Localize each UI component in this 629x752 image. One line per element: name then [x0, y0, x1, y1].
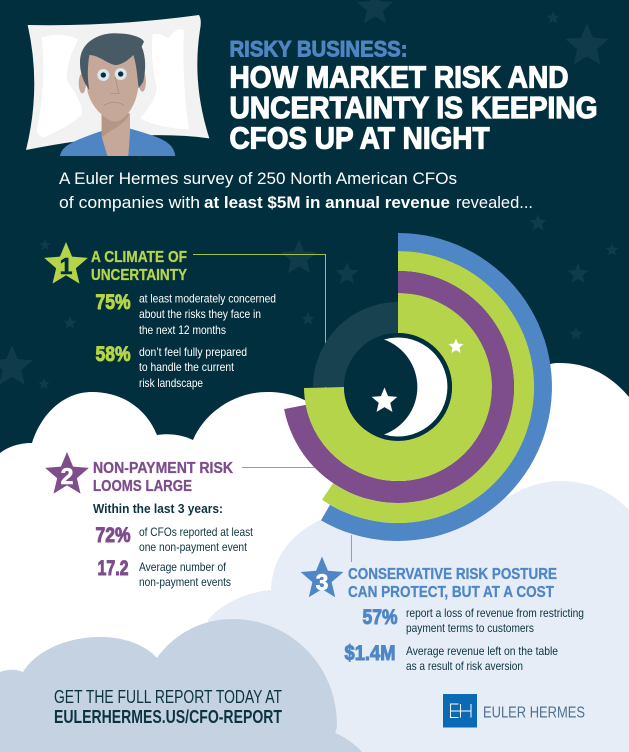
Euler Hermes logo: EULER HERMES — [483, 704, 585, 722]
stat 58% description: to handle the current — [139, 360, 235, 374]
star in moon — [372, 388, 397, 412]
footer call to action: GET THE FULL REPORT TODAY AT — [54, 687, 282, 707]
stat 57% description: report a loss of revenue from restricting — [406, 606, 584, 620]
section 1: climate of uncertainty — [44, 242, 276, 390]
heading 3: CONSERVATIVE RISK POSTURE — [348, 566, 557, 583]
heading 1 — [91, 249, 188, 284]
intro text — [59, 170, 533, 212]
heading 3: CAN PROTECT, BUT AT A COST — [348, 584, 554, 601]
stat 17.2 description: non-payment events — [139, 575, 231, 589]
stat 17.2: 17.2 — [98, 557, 128, 580]
title: CFOS UP AT NIGHT — [230, 122, 490, 156]
intro text: at least $5M in annual revenue — [204, 194, 450, 212]
subheading: Within the last 3 years: — [93, 501, 223, 516]
star badge 2: 2 — [61, 463, 73, 489]
stat 72% description — [139, 525, 254, 554]
star badge 1: 1 — [60, 253, 73, 279]
title: RISKY BUSINESS: — [230, 36, 408, 62]
stat 75% description: at least moderately concerned — [139, 292, 276, 306]
moon disc — [344, 333, 452, 441]
stat 72% description: of CFOs reported at least — [139, 525, 254, 539]
stat 75%: 75% — [96, 291, 131, 314]
footer call to action: EULERHERMES.US/CFO-REPORT — [54, 707, 282, 727]
stat 58% description: don’t feel fully prepared — [139, 345, 247, 359]
stat $1.4M: $1.4M — [344, 642, 396, 665]
star badge 1 — [44, 242, 88, 284]
stat $1.4M description: Average revenue left on the table — [406, 644, 558, 658]
heading 2: LOOMS LARGE — [93, 478, 192, 495]
faint ring track — [313, 302, 398, 387]
intro text: revealed... — [456, 194, 533, 212]
stat 75% description: the next 12 months — [139, 323, 226, 337]
stat 58% description — [139, 345, 247, 390]
footer call to action — [54, 687, 282, 727]
intro text: of companies with — [59, 194, 200, 212]
steel blue footer cloud — [0, 619, 362, 752]
stat 72%: 72% — [96, 524, 131, 547]
green arc 58% — [322, 251, 534, 523]
stat 57% description: payment terms to customers — [406, 621, 534, 635]
stat 58%: 58% — [96, 343, 131, 366]
crescent moon — [384, 338, 447, 436]
stat 57%: 57% — [362, 606, 398, 629]
stat 17.2 description: Average number of — [139, 560, 227, 574]
white cloud — [0, 363, 629, 752]
heading 2 — [93, 460, 234, 495]
green arc 75% — [304, 293, 492, 481]
blue arc 57% — [321, 233, 552, 541]
stat $1.4M description — [406, 644, 558, 673]
stat 17.2 description — [139, 560, 231, 589]
small star — [448, 338, 464, 353]
title — [230, 36, 598, 156]
stat 57% description — [406, 606, 584, 635]
radial bar chart with moon — [284, 233, 552, 541]
title: UNCERTAINTY IS KEEPING — [230, 91, 598, 125]
stat 72% description: one non-payment event — [139, 540, 248, 554]
star badge 2 — [45, 452, 89, 494]
stat 75% description — [139, 292, 276, 337]
heading 3 — [348, 566, 557, 601]
star badge 3: 3 — [316, 569, 328, 595]
star badge 3 — [301, 556, 343, 597]
intro text: A Euler Hermes survey of 250 North American CFOs — [59, 170, 457, 188]
light blue cloud — [208, 481, 629, 752]
stat 75% description: about the risks they face in — [139, 307, 261, 321]
connector lines — [193, 254, 326, 390]
stat 58% description: risk landscape — [139, 376, 203, 390]
section 3: conservative risk posture — [301, 556, 584, 673]
stat $1.4M description: as a result of risk aversion — [406, 659, 523, 673]
heading 2: NON-PAYMENT RISK — [93, 460, 234, 477]
section 2: non-payment risk — [45, 452, 254, 589]
title: HOW MARKET RISK AND — [230, 60, 568, 94]
heading 1: A CLIMATE OF — [91, 249, 187, 266]
illustration: sleepless man on pillow — [26, 15, 209, 156]
heading 1: UNCERTAINTY — [91, 267, 188, 284]
Euler Hermes logo — [443, 694, 585, 728]
background stars — [0, 0, 619, 389]
purple arc 72% — [284, 271, 514, 503]
